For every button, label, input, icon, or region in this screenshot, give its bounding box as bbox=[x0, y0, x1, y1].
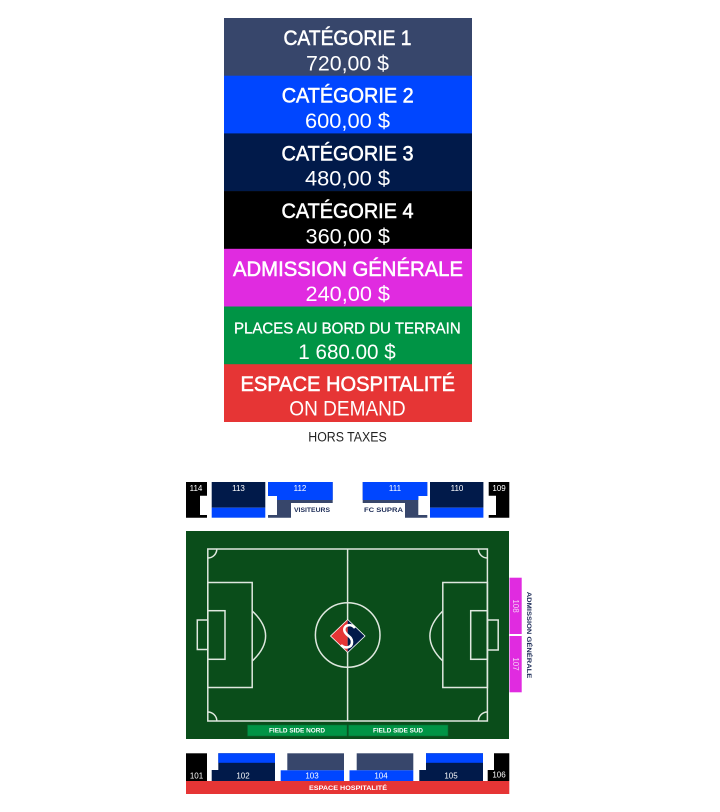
category 1 row: CATÉGORIE 1 bbox=[284, 27, 412, 50]
field side south: FIELD SIDE SUD bbox=[373, 729, 424, 735]
pitch markings bbox=[197, 549, 498, 721]
section 106 bbox=[488, 753, 509, 781]
section 110: 110 bbox=[451, 484, 464, 493]
visitors label: VISITEURS bbox=[294, 507, 331, 514]
category 2 row bbox=[224, 76, 472, 134]
section 107: 107 bbox=[511, 657, 520, 671]
general admission label: ADMISSION GÉNÉRALE bbox=[525, 592, 534, 679]
category 4 row bbox=[224, 191, 472, 249]
tax note: HORS TAXES bbox=[308, 430, 387, 445]
section 114: 114 bbox=[190, 484, 203, 493]
section 111: 111 bbox=[389, 484, 402, 493]
club logo bbox=[330, 620, 365, 652]
section 103: 103 bbox=[305, 772, 319, 780]
pitch-side seats row: PLACES AU BORD DU TERRAIN bbox=[234, 320, 461, 337]
price list panel bbox=[224, 18, 472, 422]
section 103 bbox=[281, 753, 344, 781]
hospitality row: ON DEMAND bbox=[289, 396, 406, 420]
section 101 bbox=[186, 753, 207, 781]
section 104: 104 bbox=[374, 772, 388, 780]
section 111 bbox=[363, 482, 427, 518]
pitch-side seats row: 1 680.00 $ bbox=[298, 340, 396, 364]
category 1 row bbox=[224, 18, 472, 76]
hospitality strip bbox=[186, 781, 509, 794]
category 3 row: CATÉGORIE 3 bbox=[282, 142, 414, 165]
general admission stand bbox=[510, 578, 534, 692]
category 4 row: 360,00 $ bbox=[306, 224, 390, 248]
section 102: 102 bbox=[236, 772, 250, 780]
category 4 row: CATÉGORIE 4 bbox=[282, 200, 414, 223]
category 3 row bbox=[224, 133, 472, 191]
section 113 bbox=[212, 482, 265, 518]
home label: FC SUPRA bbox=[364, 507, 403, 514]
section 109 bbox=[489, 482, 509, 518]
section 112: 112 bbox=[294, 484, 307, 493]
pitch-side seats row bbox=[224, 306, 472, 364]
pitch ground bbox=[186, 531, 509, 739]
section 101: 101 bbox=[190, 772, 204, 780]
field side south bbox=[348, 725, 448, 736]
section 106: 106 bbox=[492, 770, 506, 780]
hospitality row bbox=[224, 364, 472, 422]
top stands bbox=[186, 482, 509, 518]
section 114 bbox=[186, 482, 207, 518]
general admission row bbox=[224, 249, 472, 307]
section 105 bbox=[419, 753, 483, 781]
field side north bbox=[248, 725, 347, 736]
general admission row: ADMISSION GÉNÉRALE bbox=[233, 258, 463, 281]
bottom stands bbox=[186, 753, 509, 794]
section 108: 108 bbox=[511, 599, 520, 613]
general admission row: 240,00 $ bbox=[306, 282, 390, 306]
hospitality row: ESPACE HOSPITALITÉ bbox=[240, 373, 455, 396]
section 102 bbox=[212, 753, 275, 781]
section 105: 105 bbox=[444, 772, 458, 780]
category 3 row: 480,00 $ bbox=[305, 167, 390, 191]
section 112 bbox=[268, 482, 333, 518]
category 2 row: CATÉGORIE 2 bbox=[282, 85, 414, 108]
hospitality strip: ESPACE HOSPITALITÉ bbox=[309, 784, 387, 792]
section 110 bbox=[430, 482, 483, 518]
section 113: 113 bbox=[232, 484, 245, 493]
section 104 bbox=[350, 753, 413, 781]
category 1 row: 720,00 $ bbox=[306, 52, 389, 76]
section 109: 109 bbox=[492, 484, 506, 493]
category 2 row: 600,00 $ bbox=[305, 109, 390, 133]
field side north: FIELD SIDE NORD bbox=[269, 729, 326, 735]
football pitch bbox=[186, 531, 509, 739]
